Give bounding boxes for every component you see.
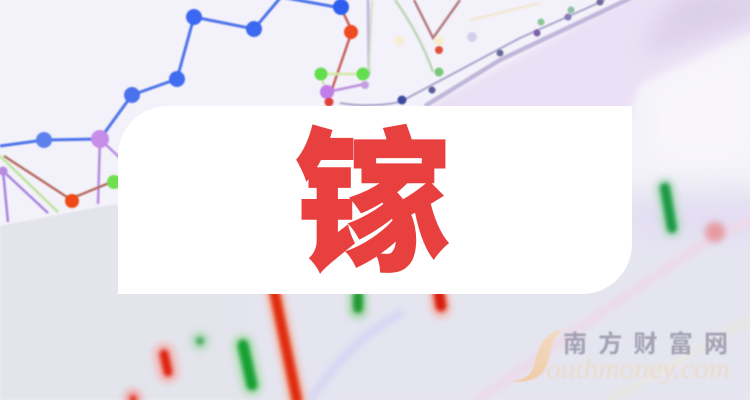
candlesticks, lower part [133,188,750,400]
watermark swoosh [511,328,568,382]
blue line [0,0,341,146]
lilac wedge at upper right [425,0,750,190]
title: red character: 镓 [295,118,450,290]
pale band at right [650,35,750,165]
chart lines, upper part [0,0,635,222]
chart nodes, upper part [0,0,604,208]
panel: white title card [118,106,632,294]
watermark Chinese name: 南方财富网 [563,330,728,358]
watermark domain: outhmoney.com [546,354,730,385]
lower grey area [0,205,300,400]
